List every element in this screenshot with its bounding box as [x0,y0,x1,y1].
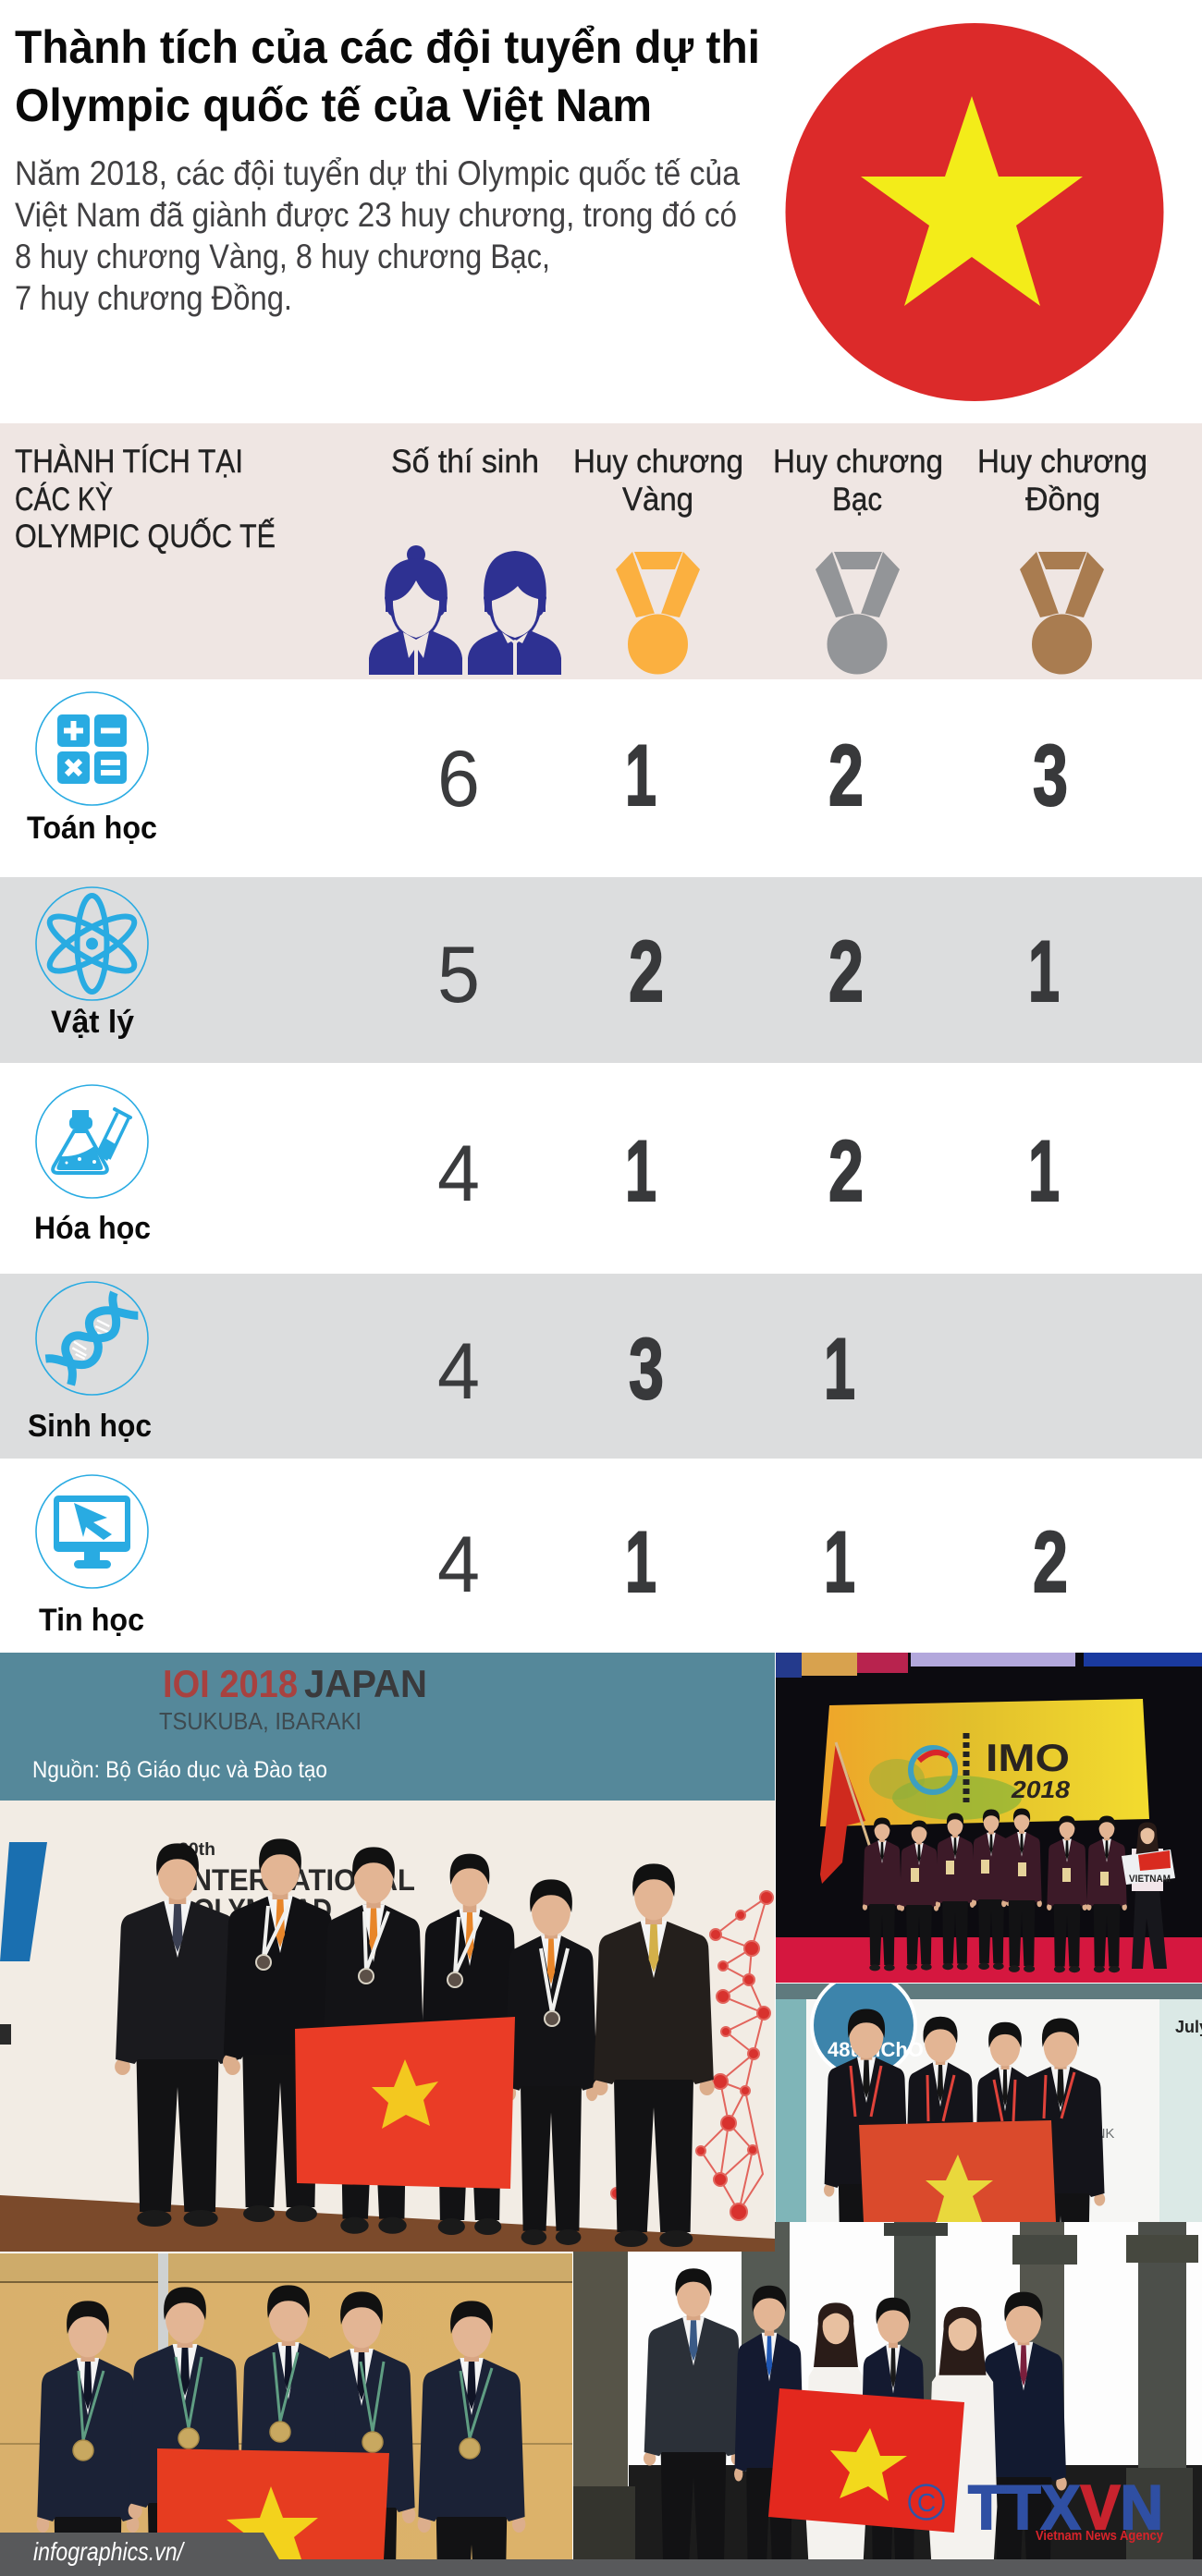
value: bronze informatics: 2 [1033,1513,1068,1610]
label: Toán học: Toán học [27,811,157,846]
value: bronze math: 3 [1033,726,1068,824]
text: IOI 2018 Japan [159,1669,425,1732]
intro text: Năm 2018, các đội tuyển dự thi Olympic quốc tế của [15,154,740,192]
text: IOI 2018 Japan: JAPAN [304,1662,427,1705]
icon: DNA [36,1282,148,1395]
medals [73,2422,480,2460]
column heading: silver: Bạc [832,482,882,518]
value: silver informatics: 1 [824,1513,855,1610]
icon: chemistry [36,1085,148,1198]
photo: IMO 2018 [776,1653,1202,1983]
panel: row Sinh học [0,1274,1202,1459]
intro text: Việt Nam đã giành được 23 huy chương, trong đó có [15,196,737,234]
column heading: gold: Huy chương [573,444,743,480]
icon: bronze medal [1020,552,1104,675]
logo: TTXVN: Vietnam News Agency [1036,2528,1164,2544]
flag [859,2120,1056,2222]
footer bar [0,2533,1202,2576]
wall lettering: INTERNATIONAL [183,1863,415,1897]
icon: math [36,692,148,805]
value: contestants math: 6 [437,735,480,824]
lanyards [79,2352,492,2440]
Vietnam placard: VIETNAM [1129,1874,1171,1885]
icon: Vietnam flag circle [786,23,1163,401]
wall lettering: OLYMPIAD [193,1893,332,1926]
flag [768,2388,964,2533]
source site: infographics.vn/ [33,2537,186,2566]
photo: team with flag among columns [573,2222,1202,2576]
screen [820,1699,1149,1826]
logo: TTXVN: C [917,2488,936,2517]
value: silver biology: 1 [824,1320,855,1417]
icon: computer [36,1475,148,1588]
Vietnam placard [1122,1850,1175,1885]
column heading: bronze [977,444,1147,518]
panel: row Hóa học [0,1063,1202,1274]
value: contestants physics: 5 [437,931,480,1019]
red lanyards [851,2066,1074,2121]
column heading: gold: Vàng [622,482,693,518]
intro text: 7 huy chương Đồng. [15,279,292,317]
icon: silver medal [816,552,900,675]
decorative network [611,1891,773,2220]
screen: IMO [986,1736,1070,1779]
icon: atom [36,887,148,1000]
column heading: contestants: Số thí sinh [391,444,539,480]
value: bronze physics: 1 [1028,922,1060,1019]
value: silver math: 2 [828,726,864,824]
value: silver physics: 2 [828,922,864,1019]
value: contestants biology: 4 [437,1327,480,1416]
icon: gold medal [616,552,700,675]
title: Thành tích của các đội tuyển dự thi [15,21,760,73]
value: contestants chemistry: 4 [437,1129,480,1218]
photo: chemistry team [776,1984,1202,2222]
value: bronze chemistry: 1 [1028,1122,1060,1219]
heading: achievements at Olympics: OLYMPIC QUỐC TẾ [15,518,276,555]
panel: row Toán học [0,679,1202,877]
test tube [96,1109,130,1161]
label: Hóa học: Hóa học [34,1211,151,1246]
screen: 2018 [1011,1776,1071,1803]
panel: row Tin học [0,1459,1202,1653]
flask [53,1110,107,1173]
label: Sinh học: Sinh học [28,1409,152,1444]
label: Tin học: Tin học [39,1603,144,1638]
icon: female student [369,545,462,675]
panel: row Vật lý [0,877,1202,1063]
intro text [15,154,740,317]
source note: Nguồn: Bộ Giáo dục và Đào tạo [32,1757,327,1783]
column heading: bronze: Huy chương [977,444,1147,480]
title: Olympic quốc tế của Việt Nam [15,79,652,131]
text: IOI 2018 Japan: TSUKUBA, IBARAKI [159,1707,362,1735]
wall lettering: 30th [178,1840,215,1860]
value: gold informatics: 1 [625,1513,656,1610]
icon: male student [468,551,561,675]
heading: achievements at Olympics [15,444,276,555]
photo: team on wooden wall [0,2253,572,2576]
logo: TTXVN: TTXVN [968,2472,1163,2543]
intro text: 8 huy chương Vàng, 8 huy chương Bạc, [15,238,550,275]
column heading: silver: Huy chương [773,444,943,480]
wall lettering [180,1842,414,1917]
flag on pole [820,1741,871,1884]
flag [157,2448,389,2559]
woman with placard [1132,1823,1167,1969]
column heading: silver [773,444,943,518]
photo: chemistry team: BANK [1077,2126,1114,2142]
column heading: bronze: Đồng [1025,482,1100,518]
value: gold physics: 2 [629,922,664,1019]
text: IOI 2018 Japan: IOI 2018 [163,1662,298,1705]
value: gold biology: 3 [629,1320,664,1417]
label: Vật lý: Vật lý [51,1005,134,1040]
value: gold chemistry: 1 [625,1122,656,1219]
photo: IOI 2018 Japan [0,1653,775,2252]
value: gold math: 1 [625,726,656,824]
value: silver chemistry: 2 [828,1122,864,1219]
panel: table header [0,423,1202,679]
photo: chemistry team: 48th IChO [828,2038,924,2061]
title [15,21,760,131]
column heading: gold [573,444,743,518]
heading: achievements at Olympics: THÀNH TÍCH TẠI [15,444,243,480]
badges [911,1860,1109,1886]
value: contestants informatics: 4 [437,1520,480,1609]
heading: achievements at Olympics: CÁC KỲ [15,482,113,518]
flag [295,2017,515,2189]
lanyards and medals [256,1906,568,2026]
